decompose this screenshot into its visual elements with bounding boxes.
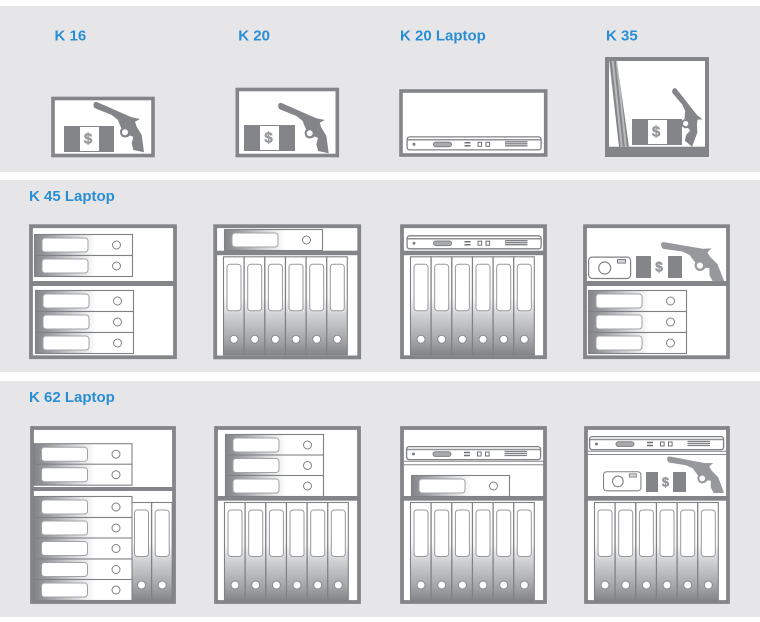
safe: K 35 xyxy=(605,57,713,157)
icon: cash: $ xyxy=(652,124,661,140)
icon: cash xyxy=(646,472,686,492)
icon: revolver xyxy=(94,102,144,152)
safe: K 45 valuables and drawers xyxy=(585,226,728,357)
icon: cash: $ xyxy=(264,130,273,146)
document stripes xyxy=(609,61,629,147)
icon: cash: $ xyxy=(84,130,93,148)
safe: K 20 xyxy=(237,90,337,156)
safe: K 62 drawers and binders xyxy=(32,428,174,602)
laptop shelf lines xyxy=(404,461,544,465)
laptop shelf lines xyxy=(588,451,727,454)
heading: K 20 Laptop: K 20 Laptop xyxy=(400,28,486,45)
icon: camera xyxy=(589,257,631,278)
heading: K 20: K 20 xyxy=(238,28,270,45)
heading: K 35: K 35 xyxy=(606,28,638,45)
icon: revolver xyxy=(278,103,329,153)
icon: revolver xyxy=(660,230,724,294)
safe: K 45 laptop and binders xyxy=(402,226,545,357)
icon: camera xyxy=(604,472,641,491)
icon: laptop xyxy=(407,137,541,150)
icon: cash: $ xyxy=(662,474,670,490)
icon: revolver xyxy=(667,446,724,504)
panel: K 62 Laptop xyxy=(0,381,760,617)
safe: K 45 drawer and binders xyxy=(215,226,359,357)
panel: K 45 Laptop xyxy=(0,180,760,372)
heading: K 62 Laptop: K 62 Laptop xyxy=(29,389,115,406)
icon: cash xyxy=(636,256,682,278)
safe: K 62 three drawers and binders xyxy=(216,428,359,602)
safe: K 62 laptop, drawer and binders xyxy=(402,428,545,602)
heading: K 45 Laptop: K 45 Laptop xyxy=(29,188,115,205)
heading: K 16: K 16 xyxy=(54,28,86,45)
panel: small safes xyxy=(0,6,760,172)
safe: K 45 drawers xyxy=(31,226,175,357)
safe: K 62 laptop, valuables and binders xyxy=(586,428,728,602)
icon: cash: $ xyxy=(655,258,663,274)
safe: K 16 xyxy=(53,98,153,156)
safe: K 20 Laptop xyxy=(401,91,546,155)
icon: revolver xyxy=(653,87,713,147)
